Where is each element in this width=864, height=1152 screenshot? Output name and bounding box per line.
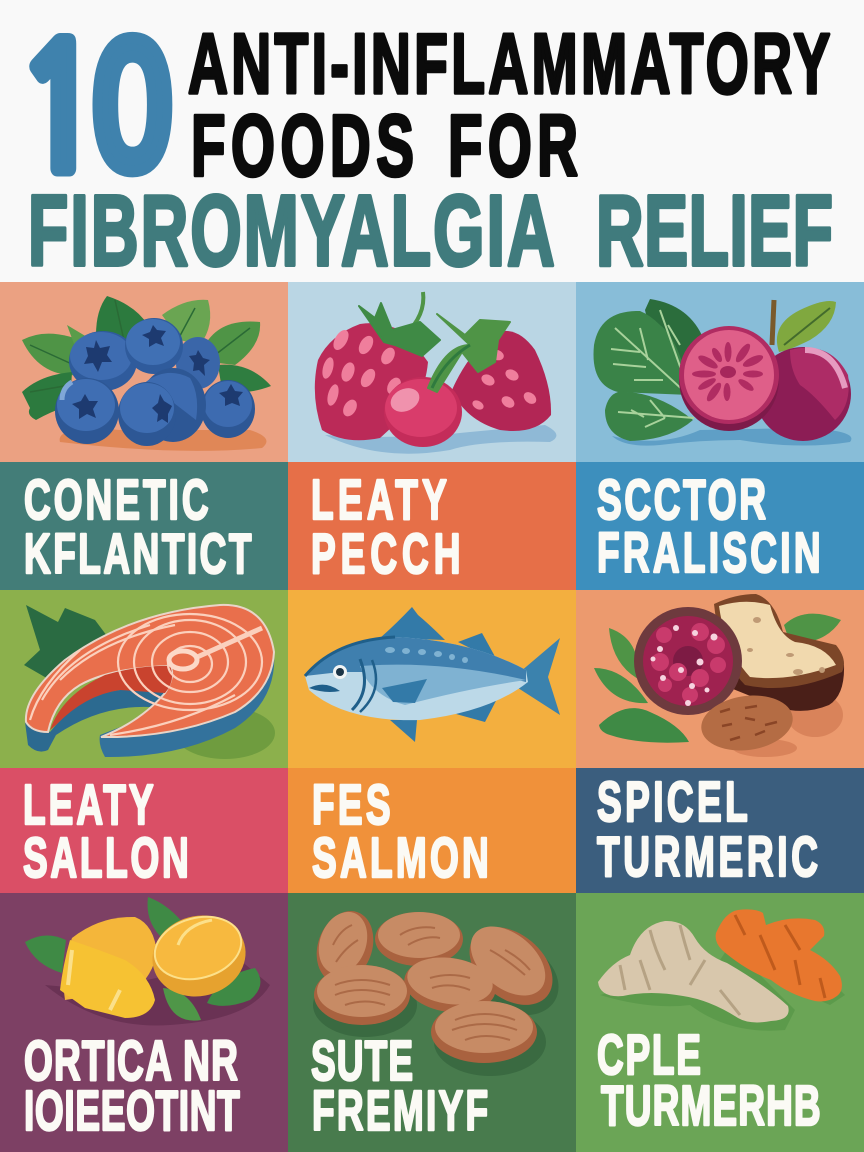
panel: raspberries xyxy=(288,282,576,462)
label: sute fremiyf: FREMIYF xyxy=(312,1079,488,1143)
icon: almonds xyxy=(307,903,572,1076)
icon: fish xyxy=(305,607,560,742)
title number 10: 0 xyxy=(90,25,174,196)
label: conetic kflantict xyxy=(0,462,288,590)
title line 1: ANTI-INFLAMMATORY xyxy=(188,17,830,112)
label: fes salmon: FES xyxy=(312,773,391,837)
panel: blueberries xyxy=(0,282,288,462)
panel: beets and spinach xyxy=(576,282,864,462)
title line 3 xyxy=(28,174,833,286)
title number 10: 1 xyxy=(16,25,104,196)
label: leaty pecch: PECCH xyxy=(311,522,461,586)
panel: lemons xyxy=(0,893,288,1152)
icon: blueberries xyxy=(22,296,271,451)
panel: pomegranate and bread xyxy=(576,590,864,768)
label: ortica nr ioieeotint: IOIEEOTINT xyxy=(24,1079,240,1143)
panel: ginger and turmeric xyxy=(576,893,864,1152)
label: leaty sallon: LEATY xyxy=(23,773,154,837)
label: leaty sallon: SALLON xyxy=(23,826,189,890)
title line 2: FOODS xyxy=(191,97,414,194)
label: cple turmerhb: TURMERHB xyxy=(601,1074,821,1138)
label: fes salmon: SALMON xyxy=(312,826,489,890)
icon: raspberries xyxy=(315,292,556,454)
title line 3: RELIEF xyxy=(596,174,833,286)
icon: lemons xyxy=(25,897,270,1026)
title line 2 xyxy=(191,97,578,194)
icon: ginger and turmeric xyxy=(598,909,845,1031)
title line 2: FOR xyxy=(448,97,578,194)
label: conetic kflantict: KFLANTICT xyxy=(24,522,252,586)
icon: salmon steak xyxy=(24,605,275,759)
label: conetic kflantict: CONETIC xyxy=(24,468,209,532)
label: leaty pecch: LEATY xyxy=(311,468,447,532)
panel: fish xyxy=(288,590,576,768)
label: sute fremiyf: SUTE xyxy=(311,1029,413,1093)
panel: salmon steak xyxy=(0,590,288,768)
label: spicel turmeric xyxy=(576,768,864,893)
label: leaty pecch xyxy=(288,462,576,590)
label: cple turmerhb: CPLE xyxy=(597,1023,701,1087)
label: fes salmon xyxy=(288,768,576,893)
label: leaty sallon xyxy=(0,768,288,893)
label: spicel turmeric: SPICEL xyxy=(597,770,748,834)
label: scctor fraliscin: FRALISCIN xyxy=(597,521,821,585)
label: cple turmerhb xyxy=(597,1023,821,1138)
label: ortica nr ioieeotint: ORTICA NR xyxy=(24,1029,238,1093)
label: sute fremiyf xyxy=(311,1029,488,1143)
icon: pomegranate, nuts and leaves xyxy=(594,594,844,757)
panel: almonds xyxy=(288,893,576,1152)
title xyxy=(16,17,833,286)
label: spicel turmeric: TURMERIC xyxy=(597,825,818,889)
title number 10 xyxy=(16,25,174,196)
label: ortica nr ioieeotint xyxy=(24,1029,240,1143)
label: scctor fraliscin xyxy=(576,462,864,590)
title line 3: FIBROMYALGIA xyxy=(28,174,555,286)
label: scctor fraliscin: SCCTOR xyxy=(597,468,766,532)
icon: beets and spinach xyxy=(594,299,851,446)
